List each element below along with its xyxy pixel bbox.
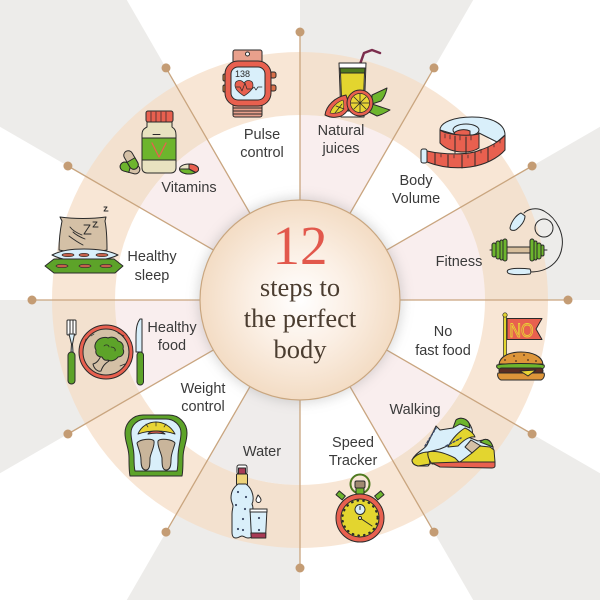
title: body — [274, 334, 327, 364]
icon: measuring tape — [421, 117, 505, 168]
label: Pulse control: Pulse — [244, 127, 280, 143]
label: Natural juices: Natural — [318, 123, 364, 139]
icon: smart watch: 138 — [235, 69, 250, 79]
label: Pulse control: control — [240, 145, 284, 161]
label: Body Volume: Volume — [392, 191, 440, 207]
label: Water: Water — [243, 444, 281, 460]
icon: running shoes — [412, 418, 495, 468]
label: Healthy food: food — [158, 338, 186, 354]
label: Natural juices: juices — [321, 141, 360, 157]
icon: dumbbell and skipping rope — [490, 209, 562, 275]
icon: burger with NO flag — [497, 313, 544, 380]
center circle shadow — [198, 198, 402, 402]
peach ring — [84, 84, 516, 516]
title — [244, 215, 357, 364]
label: Weight control: control — [181, 399, 225, 415]
icon: bathroom scale — [125, 415, 187, 476]
center circle — [200, 200, 400, 400]
label: No fast food: No — [434, 324, 452, 340]
label: Body Volume: Body — [399, 173, 433, 189]
icon: vitamins bottle and pills — [119, 111, 199, 175]
label: Healthy sleep: Healthy — [127, 249, 177, 265]
label: Weight control: Weight — [181, 381, 225, 397]
label: Vitamins: Vitamins — [161, 180, 217, 196]
icon: juice glass with orange slices — [325, 50, 390, 117]
label: Walking: Walking — [389, 402, 441, 418]
icon: plate with broccoli and cutlery — [67, 319, 144, 385]
icon: smart watch — [223, 50, 276, 117]
icon: burger with NO flag: NO — [510, 321, 534, 342]
label: Fitness: Fitness — [436, 254, 482, 270]
label: Healthy sleep: sleep — [135, 268, 169, 284]
title: 12 — [272, 215, 328, 276]
inner sectors — [115, 115, 485, 485]
icon: stopwatch — [336, 474, 384, 542]
icon: water bottle and glass — [231, 465, 267, 538]
icon: stacked pillows with zzz — [45, 207, 123, 273]
title: steps to — [260, 272, 340, 302]
label: Speed Tracker: Tracker — [329, 453, 377, 469]
label: Speed Tracker: Speed — [332, 435, 374, 451]
label: Healthy food: Healthy — [147, 320, 197, 336]
title: the perfect — [244, 303, 357, 333]
label: No fast food: fast food — [415, 343, 471, 359]
